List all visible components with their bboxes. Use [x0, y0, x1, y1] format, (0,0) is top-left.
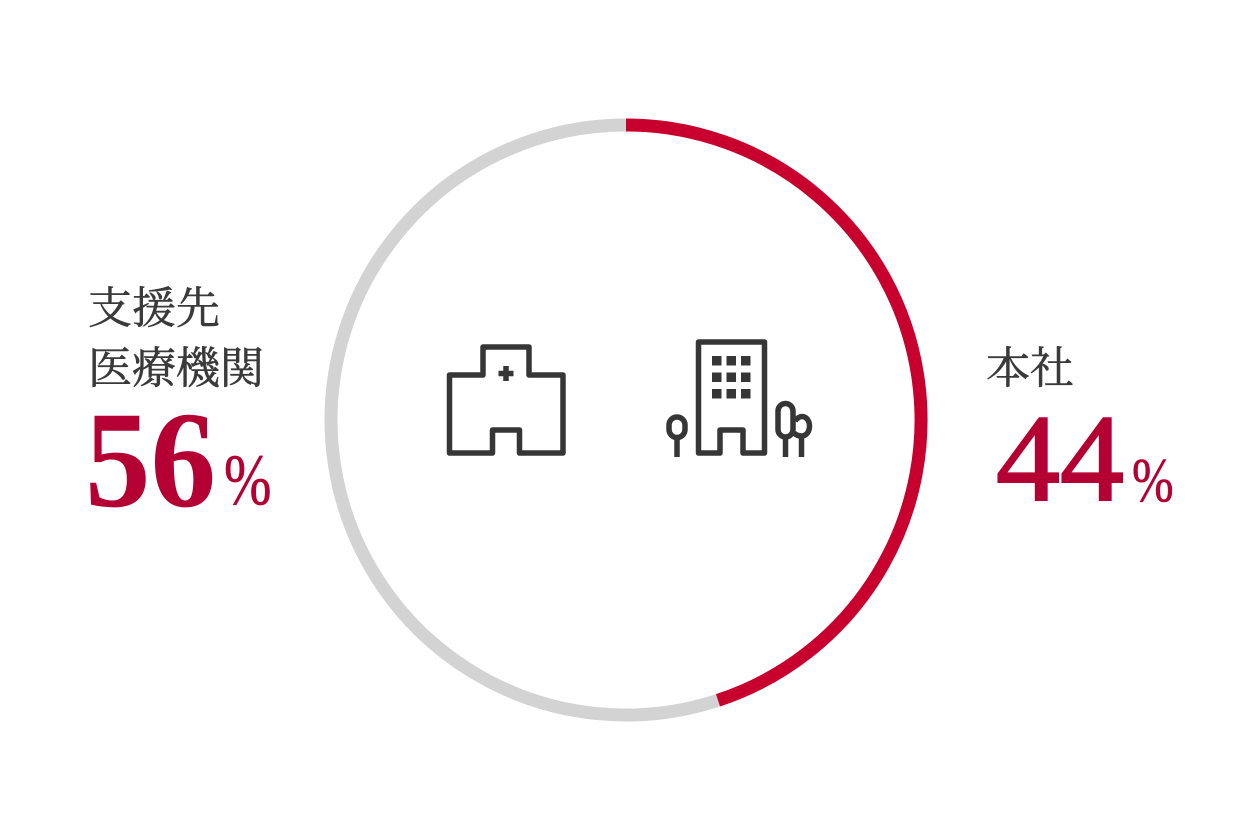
icon: office building with trees	[669, 342, 810, 457]
value: 56 percent: %	[224, 441, 271, 521]
heading line 1: 支援先	[88, 284, 220, 333]
icon: hospital	[450, 347, 563, 453]
donut chart	[331, 125, 921, 715]
heading line 2: 医療機関	[88, 344, 264, 393]
label: headquarters	[986, 344, 1174, 527]
heading: 本社	[986, 344, 1074, 393]
label: support medical institutions	[85, 284, 271, 536]
value: 44 percent: %	[1132, 447, 1174, 515]
segment: red 44%	[626, 125, 921, 700]
value: 56 percent: 56	[85, 383, 216, 536]
value: 44 percent	[996, 390, 1174, 527]
segment: gray 56%	[331, 125, 718, 715]
value: 44 percent: 44	[996, 390, 1124, 527]
